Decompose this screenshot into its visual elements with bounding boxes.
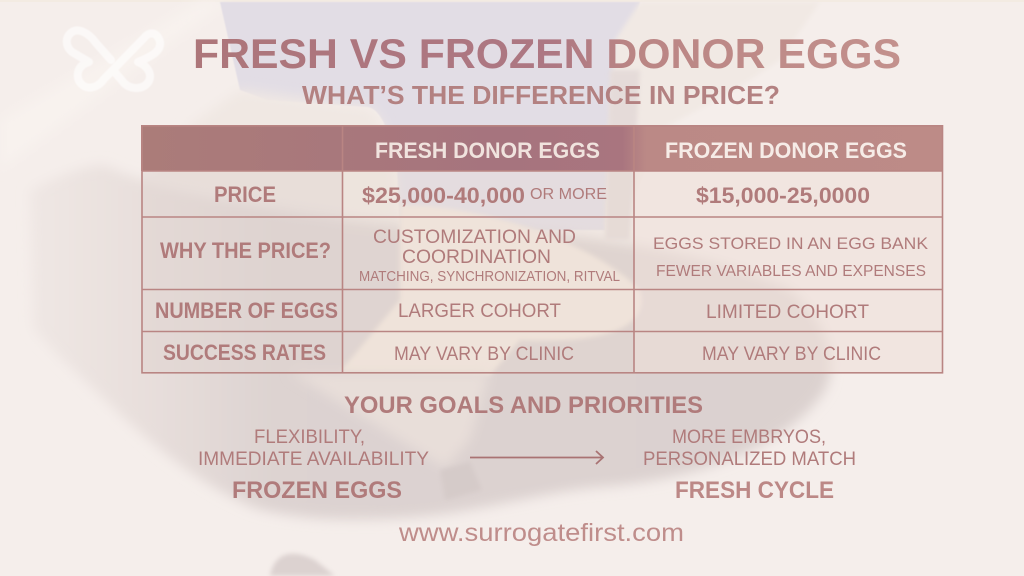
fresh price suffix: OR MORE bbox=[530, 186, 607, 203]
title: FRESH VS FROZEN DONOR EGGS bbox=[193, 30, 901, 77]
website url: www.surrogatefirst.com bbox=[398, 519, 684, 547]
row label: price: PRICE bbox=[214, 182, 276, 207]
row label: number of eggs: NUMBER OF EGGS bbox=[155, 298, 338, 323]
left priorities text: IMMEDIATE AVAILABILITY bbox=[198, 449, 429, 470]
frozen reason: EGGS STORED IN AN EGG BANK bbox=[653, 234, 929, 253]
right priorities text bbox=[643, 427, 856, 470]
frozen success rate: MAY VARY BY CLINIC bbox=[702, 344, 881, 365]
frozen egg count: LIMITED COHORT bbox=[706, 302, 869, 323]
left priorities text: FLEXIBILITY, bbox=[254, 427, 365, 448]
left priorities text bbox=[198, 427, 429, 470]
left result: frozen eggs: FROZEN EGGS bbox=[232, 477, 402, 504]
table body tint bbox=[141, 171, 342, 373]
table header band bbox=[141, 125, 943, 171]
arrow bbox=[470, 451, 603, 464]
fresh reason: CUSTOMIZATION AND bbox=[373, 227, 576, 248]
fresh reason bbox=[359, 227, 620, 285]
table grid bbox=[142, 125, 943, 373]
right result: fresh cycle: FRESH CYCLE bbox=[675, 477, 834, 504]
fresh success rate: MAY VARY BY CLINIC bbox=[394, 344, 574, 365]
section heading: goals and priorities: YOUR GOALS AND PRIORITIES bbox=[344, 392, 703, 419]
frozen reason: FEWER VARIABLES AND EXPENSES bbox=[656, 263, 926, 280]
right priorities text: MORE EMBRYOS, bbox=[672, 427, 826, 448]
fresh reason: MATCHING, SYNCHRONIZATION, RITVAL bbox=[359, 268, 620, 285]
row label: success rates: SUCCESS RATES bbox=[163, 340, 326, 365]
row label: why the price: WHY THE PRICE? bbox=[160, 238, 331, 263]
comparison table bbox=[141, 125, 943, 373]
right priorities text: PERSONALIZED MATCH bbox=[643, 449, 856, 470]
header: frozen donor eggs: FROZEN DONOR EGGS bbox=[665, 138, 907, 163]
subtitle: WHAT’S THE DIFFERENCE IN PRICE? bbox=[302, 80, 780, 110]
header: fresh donor eggs: FRESH DONOR EGGS bbox=[375, 138, 600, 163]
logo: butterfly mark bbox=[67, 30, 160, 88]
fresh reason: COORDINATION bbox=[402, 247, 551, 268]
frozen price: $15,000-25,0000 bbox=[696, 183, 870, 208]
fresh egg count: LARGER COHORT bbox=[398, 301, 561, 322]
frozen reason bbox=[653, 234, 929, 280]
fresh price: $25,000-40,000 bbox=[362, 183, 525, 208]
